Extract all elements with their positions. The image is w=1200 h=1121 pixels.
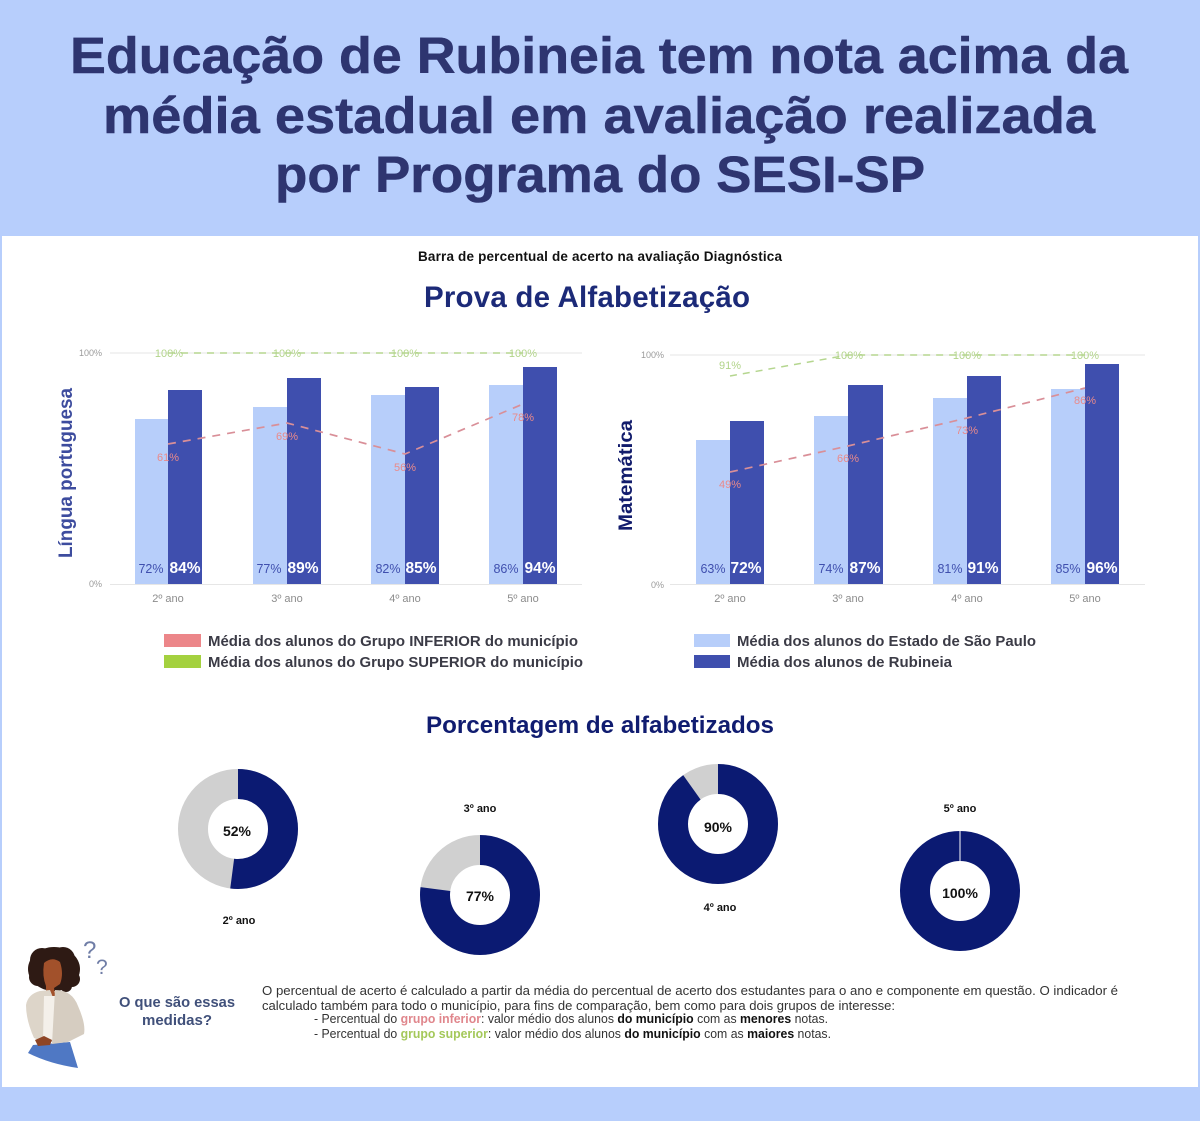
state values: 77% — [256, 562, 282, 576]
rubineia values: 85% — [405, 560, 437, 577]
rubineia values: 89% — [287, 560, 319, 577]
explanatory text: - Percentual do grupo superior: valor médio dos alunos do município com as maiores notas. — [314, 1027, 831, 1041]
rubineia values: 87% — [849, 560, 881, 577]
year labels: 5º ano — [507, 593, 539, 605]
explanatory text: - Percentual do grupo inferior: valor médio dos alunos do município com as menores notas. — [314, 1012, 828, 1026]
state values — [700, 562, 1081, 576]
year labels: 5º ano — [1069, 593, 1101, 605]
upper group line: 100% — [391, 348, 419, 360]
lower group line — [719, 388, 1096, 491]
lower group line: 86% — [1074, 395, 1096, 407]
year labels: 2º ano — [714, 593, 746, 605]
rubineia values — [730, 560, 1118, 577]
year labels: 4º ano — [951, 593, 983, 605]
explanatory text: O percentual de acerto é calculado a partir da média do percentual de acerto dos estudantes para o ano e componente em questão. O indicador é — [262, 984, 1118, 998]
y axis title: Língua portuguesa — [56, 388, 77, 558]
lower group line — [157, 404, 534, 474]
legend: Média dos alunos do Grupo INFERIOR do município — [208, 634, 578, 650]
chart: matemática — [616, 350, 1145, 605]
donut: 3º ano 77% — [435, 803, 525, 940]
icon: thinking woman: ? — [83, 937, 96, 964]
year labels: 2º ano — [152, 593, 184, 605]
axis lines and ticks — [641, 350, 1145, 590]
legend — [164, 634, 1036, 671]
icon: thinking woman: ? — [96, 956, 108, 979]
axis lines and ticks: 100% — [641, 350, 664, 360]
rubineia values: 96% — [1086, 560, 1118, 577]
rubineia values: 72% — [730, 560, 762, 577]
legend: Média dos alunos do Estado de São Paulo — [737, 634, 1036, 650]
axis lines and ticks: 100% — [79, 348, 102, 358]
state values: 82% — [375, 562, 401, 576]
question heading — [119, 994, 235, 1029]
title — [70, 27, 1129, 203]
axis lines and ticks: 0% — [89, 579, 102, 589]
year labels: 4º ano — [389, 593, 421, 605]
explanatory text — [262, 984, 1118, 1041]
white content panel — [2, 236, 1198, 1087]
question heading: medidas? — [142, 1012, 212, 1029]
donut: 4º ano 90%: 4º ano — [704, 902, 737, 914]
upper group line — [155, 348, 537, 360]
upper group line: 100% — [1071, 350, 1099, 362]
axis lines and ticks — [79, 348, 582, 589]
heading: porcentagem de alfabetizados: Porcentagem de alfabetizados — [426, 712, 774, 739]
rubineia values: 91% — [967, 560, 999, 577]
donut: 4º ano 90%: 90% — [704, 819, 733, 835]
state bars — [696, 389, 1085, 584]
lower group line: 73% — [956, 425, 978, 437]
icon: thinking woman — [26, 937, 108, 1068]
lower group line: 56% — [394, 462, 416, 474]
donut: 2º ano 52%: 2º ano — [223, 915, 256, 927]
donut: 5º ano 100%: 100% — [942, 885, 978, 901]
lower group line: 49% — [719, 479, 741, 491]
state values: 85% — [1055, 562, 1081, 576]
rubineia values — [169, 560, 556, 577]
rubineia bars — [730, 364, 1119, 584]
lower group line: 61% — [157, 452, 179, 464]
legend: Média dos alunos de Rubineia — [737, 655, 953, 671]
state values: 86% — [493, 562, 519, 576]
state values — [138, 562, 519, 576]
donut: 2º ano 52% — [193, 784, 283, 927]
lower group line: 78% — [512, 412, 534, 424]
question heading: O que são essas — [119, 994, 235, 1011]
rubineia values: 94% — [524, 560, 556, 577]
lower group line: 69% — [276, 431, 298, 443]
state values: 74% — [818, 562, 844, 576]
explanatory text: calculado também para todo o município, para fins de comparação, bem como para dois grupos de interesse: — [262, 999, 895, 1013]
upper group line: 100% — [273, 348, 301, 360]
upper group line: 100% — [155, 348, 183, 360]
year labels: 3º ano — [271, 593, 303, 605]
heading: prova de alfabetização: Prova de Alfabetização — [424, 281, 750, 314]
chart: língua portuguesa — [56, 348, 582, 605]
upper group line: 91% — [719, 360, 741, 372]
donut: 4º ano 90% — [673, 779, 763, 914]
state bars — [135, 385, 523, 584]
state values: 81% — [937, 562, 963, 576]
rubineia values: 84% — [169, 560, 201, 577]
title: média estadual em avaliação realizada — [103, 87, 1096, 144]
upper group line — [719, 350, 1099, 376]
title: Educação de Rubineia tem nota acima da — [70, 27, 1129, 84]
state values: 63% — [700, 562, 726, 576]
lower group line: 66% — [837, 453, 859, 465]
donut: 3º ano 77%: 3º ano — [464, 803, 497, 815]
year labels — [714, 593, 1101, 605]
axis lines and ticks: 0% — [651, 580, 664, 590]
rubineia bars — [168, 367, 557, 584]
title: por Programa do SESI-SP — [275, 146, 925, 203]
upper group line: 100% — [509, 348, 537, 360]
donut: 3º ano 77%: 77% — [466, 888, 495, 904]
upper group line: 100% — [835, 350, 863, 362]
donut: 2º ano 52%: 52% — [223, 823, 252, 839]
legend: Média dos alunos do Grupo SUPERIOR do município — [208, 655, 583, 671]
upper group line: 100% — [953, 350, 981, 362]
donut: 5º ano 100% — [915, 803, 1005, 936]
donut: 5º ano 100%: 5º ano — [944, 803, 977, 815]
subtitle: Barra de percentual de acerto na avaliação Diagnóstica — [418, 249, 782, 264]
year labels — [152, 593, 539, 605]
state values: 72% — [138, 562, 164, 576]
year labels: 3º ano — [832, 593, 864, 605]
y axis title: Matemática — [616, 420, 637, 531]
